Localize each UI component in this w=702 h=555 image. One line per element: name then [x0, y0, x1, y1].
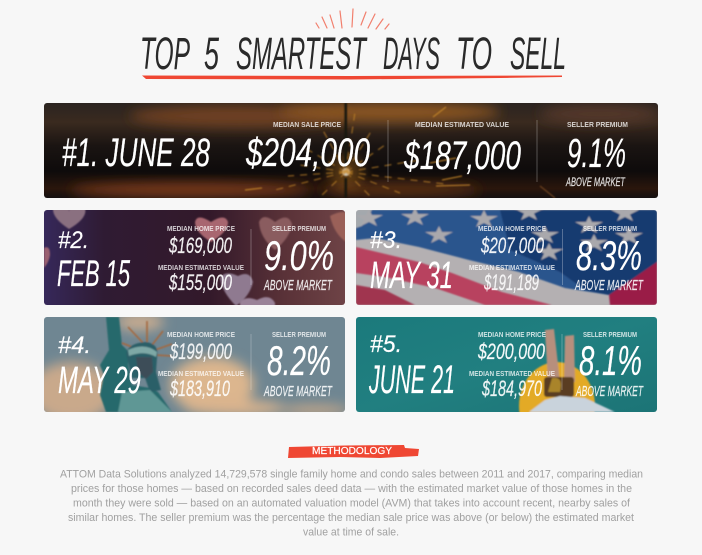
- title text: DAYS: [383, 28, 440, 79]
- methodology heading badge: METHODOLOGY: [312, 445, 392, 457]
- rank and date: [368, 331, 455, 402]
- median estimated value: $187,000: [403, 134, 521, 178]
- median prices: MEDIAN ESTIMATED VALUE: [158, 265, 244, 272]
- rank and date: #5.: [370, 331, 402, 358]
- seller premium: ABOVE MARKET: [574, 277, 644, 294]
- title text: TO: [456, 28, 492, 79]
- seller premium: SELLER PREMIUM: [583, 332, 637, 339]
- seller premium: 9.0%: [264, 232, 334, 279]
- panel: #3 May 31: [355, 203, 657, 305]
- seller premium: SELLER PREMIUM: [567, 122, 628, 129]
- seller premium: ABOVE MARKET: [575, 383, 644, 400]
- seller premium: 9.1%: [567, 130, 626, 176]
- seller premium: [263, 226, 334, 294]
- median prices: MEDIAN HOME PRICE: [478, 332, 546, 339]
- methodology paragraph: ATTOM Data Solutions analyzed 14,729,578 single family home and condo sales between 2011 and 2017, comparing median: [60, 468, 643, 480]
- median prices: $200,000: [477, 339, 546, 364]
- panel: #2 Feb 15: [44, 210, 345, 305]
- flag photo background: [355, 203, 657, 305]
- median sale price: [245, 122, 370, 175]
- rank and date: MAY 31: [370, 255, 453, 297]
- seller premium: [574, 226, 644, 294]
- seller premium: [575, 332, 644, 400]
- rank and date: [57, 227, 130, 294]
- median prices: $183,910: [169, 376, 230, 401]
- median prices: $191,189: [483, 270, 539, 295]
- seller premium: [565, 122, 628, 189]
- median prices: MEDIAN ESTIMATED VALUE: [469, 265, 555, 272]
- methodology paragraph: prices for those homes — based on recorded sales deed data — with the estimated market value of those homes in the: [71, 483, 632, 495]
- median prices: $155,000: [168, 270, 233, 295]
- median prices: $184,970: [481, 376, 542, 401]
- hearts photo background: [44, 210, 345, 305]
- median prices: MEDIAN ESTIMATED VALUE: [158, 371, 244, 378]
- seller premium: 8.3%: [576, 232, 642, 279]
- rank and date: MAY 29: [58, 360, 141, 402]
- seller premium: ABOVE MARKET: [263, 383, 333, 400]
- median estimated value: [403, 122, 521, 178]
- statue of liberty photo background: [44, 317, 345, 412]
- panel: #4 May 29: [44, 317, 345, 412]
- title text: SMARTEST: [236, 28, 368, 79]
- rank and date: FEB 15: [57, 253, 130, 294]
- median estimated value: MEDIAN ESTIMATED VALUE: [415, 122, 509, 129]
- median sale price: $204,000: [245, 131, 370, 175]
- methodology heading badge: [288, 445, 419, 458]
- methodology paragraph: similar homes. The seller premium was the percentage the median sale price was above (or below) the estimated market: [68, 512, 634, 524]
- seller premium: ABOVE MARKET: [263, 277, 333, 294]
- median prices: MEDIAN HOME PRICE: [478, 226, 546, 233]
- median prices: MEDIAN HOME PRICE: [167, 226, 235, 233]
- rank and date: #3.: [370, 227, 402, 254]
- title text: TOP: [140, 28, 190, 79]
- seller premium: ABOVE MARKET: [565, 175, 626, 189]
- rank and date: [370, 227, 453, 297]
- seller premium: SELLER PREMIUM: [272, 332, 326, 339]
- seller premium: [263, 332, 333, 400]
- title group: [140, 9, 566, 80]
- panel: #1 June 28: [44, 102, 660, 198]
- rank and date: [58, 332, 141, 402]
- icon: sun rays above title: [316, 9, 389, 29]
- rank and date: #2.: [58, 227, 89, 254]
- methodology section: [60, 445, 643, 538]
- median prices: [469, 226, 555, 295]
- rank and date: #1. JUNE 28: [62, 131, 210, 175]
- median prices: [158, 226, 244, 295]
- seller premium: 8.1%: [579, 337, 642, 384]
- median prices: $199,000: [169, 339, 233, 364]
- methodology paragraph: month they were sold — based on an automated valuation model (AVM) that takes into account recent, nearby sales of: [73, 498, 631, 510]
- sparkler photo background: [44, 102, 660, 198]
- rank and date: #4.: [58, 332, 91, 359]
- median prices: MEDIAN HOME PRICE: [167, 332, 235, 339]
- title text: [140, 28, 566, 79]
- methodology paragraph: value at time of sale.: [303, 526, 399, 538]
- pool float photo background: [356, 317, 657, 412]
- median prices: $207,000: [480, 233, 545, 258]
- panel: #5 June 21: [356, 317, 657, 412]
- median prices: $169,000: [168, 233, 233, 258]
- red brush underline: [142, 76, 562, 80]
- median prices: MEDIAN ESTIMATED VALUE: [469, 371, 555, 378]
- title text: SELL: [510, 28, 566, 79]
- seller premium: 8.2%: [267, 337, 331, 384]
- methodology paragraph: [60, 468, 643, 538]
- median prices: [158, 332, 244, 401]
- title text: 5: [204, 28, 220, 79]
- median prices: [469, 332, 555, 401]
- median sale price: MEDIAN SALE PRICE: [273, 122, 341, 129]
- rank and date: JUNE 21: [368, 358, 455, 402]
- seller premium: SELLER PREMIUM: [272, 226, 326, 233]
- seller premium: SELLER PREMIUM: [583, 226, 637, 233]
